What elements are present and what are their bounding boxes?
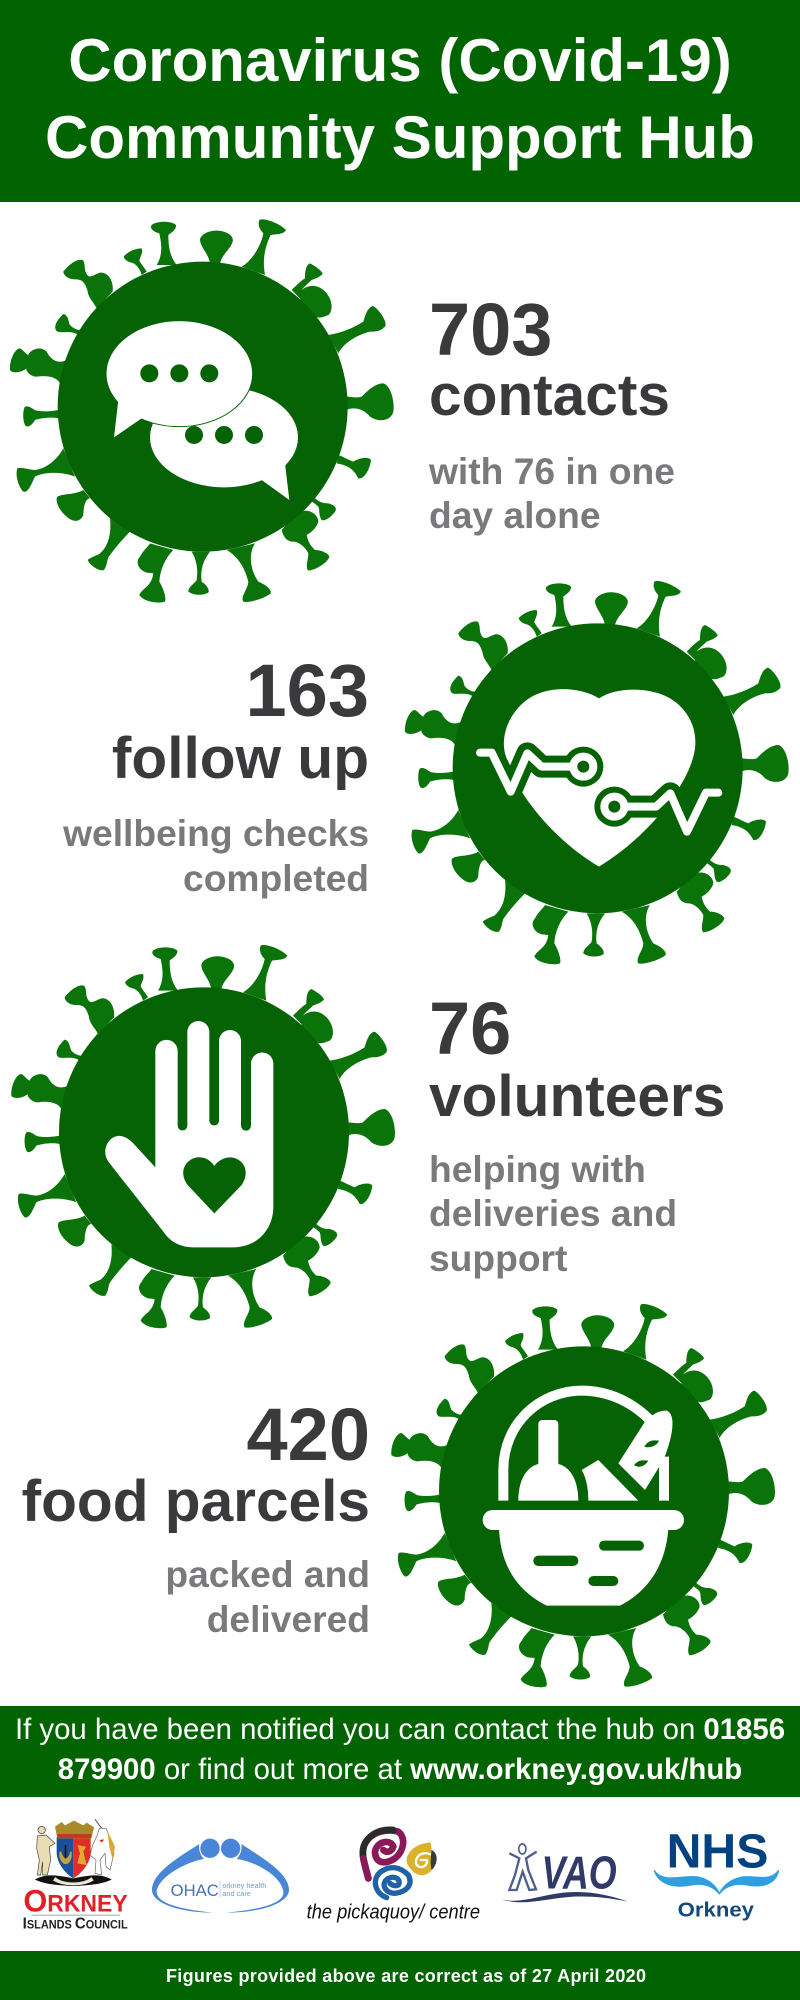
logo: OHAC: and care xyxy=(222,1889,251,1898)
stat: volunteers: 76 xyxy=(429,987,511,1070)
stat: food parcels: packed and xyxy=(165,1553,370,1595)
title: Community Support Hub xyxy=(45,104,755,171)
logo: NHS Orkney xyxy=(654,1824,779,1922)
stat: food parcels: food parcels xyxy=(22,1469,370,1534)
contact banner xyxy=(0,1706,800,1797)
logo: VAO xyxy=(502,1844,628,1902)
contact banner: If you have been notified you can contact the hub on 01856 xyxy=(15,1713,785,1746)
stat: volunteers: support xyxy=(429,1237,567,1279)
virus icon: heart with pulse xyxy=(405,581,789,964)
virus icon: food basket xyxy=(391,1304,775,1687)
stat: volunteers: deliveries and xyxy=(429,1192,677,1234)
stat: follow up: wellbeing checks xyxy=(62,812,369,854)
coat of arms xyxy=(35,1819,115,1886)
stat: follow up xyxy=(62,649,369,899)
logo: VAO: VAO xyxy=(542,1846,617,1898)
footer banner: Figures provided above are correct as of 27 April 2020 xyxy=(166,1966,646,1986)
header banner xyxy=(0,0,800,202)
contact banner: 879900 or find out more at www.orkney.gov.uk/hub xyxy=(58,1753,742,1786)
virus icon: speech bubbles xyxy=(10,219,394,603)
logo: the pickaquoy centre xyxy=(307,1830,480,1923)
logo: the pickaquoy centre: the pickaquoy/ centre xyxy=(307,1901,480,1923)
title: Coronavirus (Covid-19) xyxy=(68,27,732,94)
swirls xyxy=(363,1830,437,1898)
stat: volunteers: helping with xyxy=(429,1148,646,1190)
logo: Orkney Islands Council: ISLANDS COUNCIL xyxy=(23,1915,128,1932)
stat: food parcels: delivered xyxy=(207,1598,370,1640)
footer banner xyxy=(0,1951,800,2000)
stat: follow up: completed xyxy=(183,857,369,899)
virus icon: hand with heart xyxy=(11,945,395,1328)
logo: NHS Orkney: NHS xyxy=(667,1824,768,1878)
stat: follow up: follow up xyxy=(112,726,369,791)
logo: OHAC: orkney health xyxy=(222,1881,266,1890)
stat: contacts: day alone xyxy=(429,494,601,536)
logo: OHAC: OHAC xyxy=(171,1881,219,1900)
logo: Orkney Islands Council xyxy=(23,1819,128,1932)
stat: follow up: 163 xyxy=(246,649,369,732)
stat: volunteers: volunteers xyxy=(429,1064,725,1129)
stat: food parcels: 420 xyxy=(247,1393,370,1476)
stat: contacts: contacts xyxy=(429,363,670,428)
stat: contacts: with 76 in one xyxy=(428,450,675,492)
logo: NHS Orkney: Orkney xyxy=(678,1900,754,1922)
stat: volunteers xyxy=(429,987,725,1279)
title xyxy=(45,27,755,171)
logo: Orkney Islands Council: ORKNEY xyxy=(23,1883,128,1919)
stat: contacts: 703 xyxy=(429,288,552,371)
logo: OHAC xyxy=(152,1839,289,1913)
stat: food parcels xyxy=(22,1393,370,1640)
stat: contacts xyxy=(428,288,675,536)
